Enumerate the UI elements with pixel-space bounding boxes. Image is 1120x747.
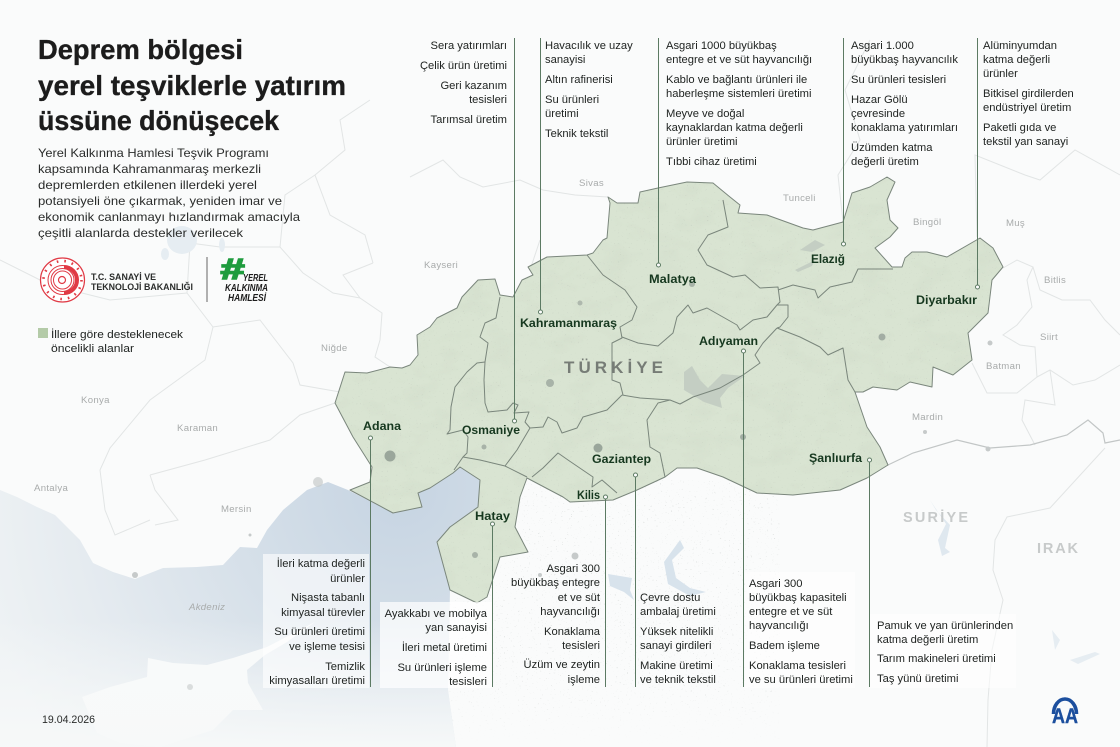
callout: Diyarbakır list: Bitkisel girdilerden — [983, 88, 1074, 100]
callout: Diyarbakır list: tekstil yan sanayi — [983, 136, 1068, 148]
callout: Kahramanmaraş list: Altın rafinerisi — [545, 74, 613, 86]
intro paragraph: Yerel Kalkınma Hamlesi Teşvik Programı — [38, 146, 269, 160]
callout: Diyarbakır list: Alüminyumdan — [983, 40, 1057, 52]
province names: Hatay — [475, 509, 510, 523]
callout: Malatya list: entegre et ve süt hayvancılığı — [666, 54, 812, 66]
province borders — [335, 177, 1003, 603]
callout: Malatya list: kaynaklardan katma değerli — [666, 122, 803, 134]
callout: Şanlıurfa list — [868, 458, 1013, 687]
callout: Elazığ list: Üzümden katma — [851, 142, 933, 154]
callout: Adana list: İleri katma değerli — [277, 557, 365, 570]
background place names: Karaman — [177, 423, 218, 434]
callout: Osmaniye list: Geri kazanım — [440, 80, 507, 92]
callout: Şanlıurfa list: Tarım makineleri üretimi — [877, 653, 996, 665]
callout: Diyarbakır list: Paketli gıda ve — [983, 122, 1056, 134]
logo: Yerel Kalkınma Hamlesi: YEREL — [243, 273, 268, 284]
callout: Elazığ list: büyükbaş hayvancılık — [851, 54, 958, 66]
callout: Malatya list — [656, 38, 812, 267]
settlements — [132, 340, 992, 690]
logo: Yerel Kalkınma Hamlesi: # — [220, 254, 245, 286]
callout: Kilis list: hayvancılığı — [540, 606, 600, 618]
bottom text backdrops — [263, 554, 1016, 688]
intro paragraph: çeşitli alanlarda destekler verilecek — [38, 226, 244, 240]
background place names: Akdeniz — [188, 602, 225, 613]
title: üssüne dönüşecek — [38, 105, 280, 136]
island: Cyprus — [82, 622, 315, 747]
background place names: Muş — [1006, 218, 1025, 229]
callout: Adıyaman list: Asgari 300 — [749, 578, 802, 590]
callout: Malatya list: ürünler üretimi — [666, 136, 738, 148]
callout: Elazığ list — [842, 38, 958, 246]
background place names: Antalya — [34, 483, 68, 494]
province names: Diyarbakır — [916, 293, 977, 307]
callout: Gaziantep list: ambalaj üretimi — [640, 606, 716, 618]
callout: Adana list — [269, 436, 372, 687]
callout: Adana list: Su ürünleri üretimi — [274, 626, 365, 638]
background place names: Kayseri — [424, 260, 458, 271]
callout: Adana list: Nişasta tabanlı — [291, 592, 365, 604]
callout: Kilis list: et ve süt — [558, 592, 601, 604]
background place names: Sivas — [579, 178, 604, 189]
logo: Anadolu Ajansı: AA — [1052, 705, 1078, 728]
logo: T.C. Sanayi ve Teknoloji Bakanlığı: T.C. SANAYİ VE — [91, 271, 156, 282]
country name: Irak: IRAK — [1037, 541, 1079, 557]
callout: Hatay list — [385, 522, 494, 688]
callout: Malatya list: Tıbbi cihaz üretimi — [666, 156, 757, 168]
province names: Şanlıurfa — [809, 451, 862, 465]
logo divider — [206, 257, 208, 302]
date: 19.04.2026 — [42, 714, 95, 726]
callout: Elazığ list: değerli üretim — [851, 156, 919, 168]
province names: Gaziantep — [592, 452, 651, 466]
logo: T.C. Sanayi ve Teknoloji Bakanlığı: TEKNOLOJİ BAKANLIĞI — [91, 281, 193, 292]
logo: T.C. Sanayi ve Teknoloji Bakanlığı — [40, 258, 193, 302]
background place names: Niğde — [321, 343, 348, 354]
callout: Kahramanmaraş list: sanayisi — [545, 54, 585, 66]
callout: Kilis list: Asgari 300 — [546, 563, 600, 575]
callout: Adana list: kimyasal türevler — [281, 607, 365, 619]
callout: Malatya list: Kablo ve bağlantı ürünleri ile — [666, 74, 807, 86]
callout: Adana list: Temizlik — [325, 661, 365, 673]
intro paragraph: ekonomik canlanmayı hızlandırmak amacıyla — [38, 210, 300, 224]
callout: Kilis list: Konaklama — [544, 626, 601, 638]
callout: Adıyaman list: Konaklama tesisleri — [749, 660, 846, 672]
map: earthquake region provinces — [330, 175, 1010, 610]
title — [38, 34, 346, 136]
sea: Akdeniz — [0, 467, 480, 747]
title: yerel teşviklerle yatırım — [38, 70, 346, 101]
callout: Adana list: ve işleme tesisi — [289, 641, 365, 653]
province names: Elazığ — [811, 252, 845, 266]
callout: Kahramanmaraş list — [538, 38, 633, 314]
province names: Adıyaman — [699, 334, 758, 348]
callout: Adıyaman list — [742, 349, 853, 687]
callout: Osmaniye list: tesisleri — [469, 94, 507, 106]
callout: Kilis list: tesisleri — [562, 640, 600, 652]
callout: Malatya list: haberleşme sistemleri üretimi — [666, 88, 811, 100]
callout: Hatay list: tesisleri — [449, 676, 487, 688]
callout: Gaziantep list: Çevre dostu — [640, 592, 700, 604]
callout: Kahramanmaraş list: Su ürünleri — [545, 94, 599, 106]
background place names: Konya — [81, 395, 110, 406]
callout: Adıyaman list: ve su ürünleri üretimi — [749, 674, 853, 686]
intro paragraph — [38, 146, 300, 240]
callout: Kilis list: Üzüm ve zeytin — [524, 659, 600, 671]
callout: Gaziantep list: sanayi girdileri — [640, 640, 712, 652]
callout: Elazığ list: Asgari 1.000 — [851, 40, 914, 52]
logo: Yerel Kalkınma Hamlesi — [220, 254, 268, 304]
callout: Diyarbakır list: katma değerli — [983, 54, 1050, 66]
background place names: Siirt — [1040, 332, 1058, 343]
callout: Osmaniye list: Tarımsal üretim — [431, 114, 507, 126]
country name: Türkiye: TÜRKİYE — [564, 358, 663, 377]
callout: Osmaniye list — [420, 38, 516, 423]
callout: Malatya list: Asgari 1000 büyükbaş — [666, 40, 777, 52]
background place names: Mardin — [912, 412, 943, 423]
callout: Elazığ list: Hazar Gölü — [851, 94, 908, 106]
callout: Gaziantep list: Yüksek nitelikli — [640, 626, 713, 638]
intro paragraph: potansiyeli öne çıkarmak, yeniden imar ve — [38, 194, 282, 208]
callout: Kilis list — [511, 495, 608, 687]
title: Deprem bölgesi — [38, 34, 243, 65]
province names — [363, 252, 977, 523]
callout: Adana list: kimyasalları üretimi — [269, 675, 365, 687]
callout: Osmaniye list: Sera yatırımları — [431, 40, 507, 52]
legend: öncelikli alanlar — [51, 343, 134, 355]
logo: Yerel Kalkınma Hamlesi: HAMLESİ — [228, 291, 267, 304]
legend: İllere göre desteklenecek — [51, 328, 183, 341]
callout: Kilis list: işleme — [568, 674, 600, 686]
callout: Hatay list: İleri metal üretimi — [402, 641, 487, 654]
callout: Şanlıurfa list: katma değerli üretim — [877, 634, 978, 646]
callout: Elazığ list: çevresinde — [851, 108, 905, 120]
legend — [38, 328, 183, 355]
logo: Yerel Kalkınma Hamlesi: KALKINMA — [225, 283, 268, 294]
callout: Osmaniye list: Çelik ürün üretimi — [420, 60, 507, 72]
callout: Adıyaman list: Badem işleme — [749, 640, 820, 652]
callout: Diyarbakır list: ürünler — [983, 68, 1018, 80]
callout: Gaziantep list: Makine üretimi — [640, 660, 713, 672]
callout: Diyarbakır list — [976, 38, 1074, 289]
intro paragraph: depremlerden etkilenen illerdeki yerel — [38, 178, 257, 192]
callout: Elazığ list: konaklama yatırımları — [851, 122, 958, 134]
callout: Hatay list: Ayakkabı ve mobilya — [385, 608, 488, 620]
intro paragraph: kapsamında Kahramanmaraş merkezli — [38, 162, 261, 176]
callout: Malatya list: Meyve ve doğal — [666, 108, 744, 120]
background place names: Tunceli — [783, 193, 816, 204]
callout: Elazığ list: Su ürünleri tesisleri — [851, 74, 946, 86]
callout: Gaziantep list: ve teknik tekstil — [640, 674, 716, 686]
background place names: Bitlis — [1044, 275, 1066, 286]
province names: Malatya — [649, 272, 696, 286]
callout: Hatay list: yan sanayisi — [425, 622, 487, 634]
callout: Adıyaman list: entegre et ve süt — [749, 606, 833, 618]
callout: Kahramanmaraş list: Havacılık ve uzay — [545, 40, 633, 52]
callout: Kahramanmaraş list: üretimi — [545, 108, 579, 120]
callout: Diyarbakır list: endüstriyel üretim — [983, 102, 1071, 114]
callout: Şanlıurfa list: Pamuk ve yan ürünlerinden — [877, 620, 1013, 632]
callout: Gaziantep list — [634, 473, 716, 687]
callout: Kilis list: büyükbaş entegre — [511, 577, 600, 589]
callout: Şanlıurfa list: Taş yünü üretimi — [877, 673, 958, 685]
callout: Kahramanmaraş list: Teknik tekstil — [545, 128, 608, 140]
background place names: Batman — [986, 361, 1021, 372]
background place names: Bingöl — [913, 217, 941, 228]
callout: Adıyaman list: hayvancılığı — [749, 620, 809, 632]
background place names: Mersin — [221, 504, 252, 515]
callout: Adıyaman list: büyükbaş kapasiteli — [749, 592, 847, 604]
background place names — [34, 178, 1066, 613]
province names: Kilis — [577, 488, 600, 502]
country name: Suriye: SURİYE — [903, 509, 968, 526]
callout: Hatay list: Su ürünleri işleme — [397, 662, 487, 674]
lakes and cities in region — [384, 240, 886, 558]
province names: Kahramanmaraş — [520, 316, 617, 330]
province names: Osmaniye — [462, 423, 520, 437]
callout: Adana list: ürünler — [330, 573, 365, 585]
province names: Adana — [363, 419, 401, 433]
lakes — [161, 226, 1100, 664]
